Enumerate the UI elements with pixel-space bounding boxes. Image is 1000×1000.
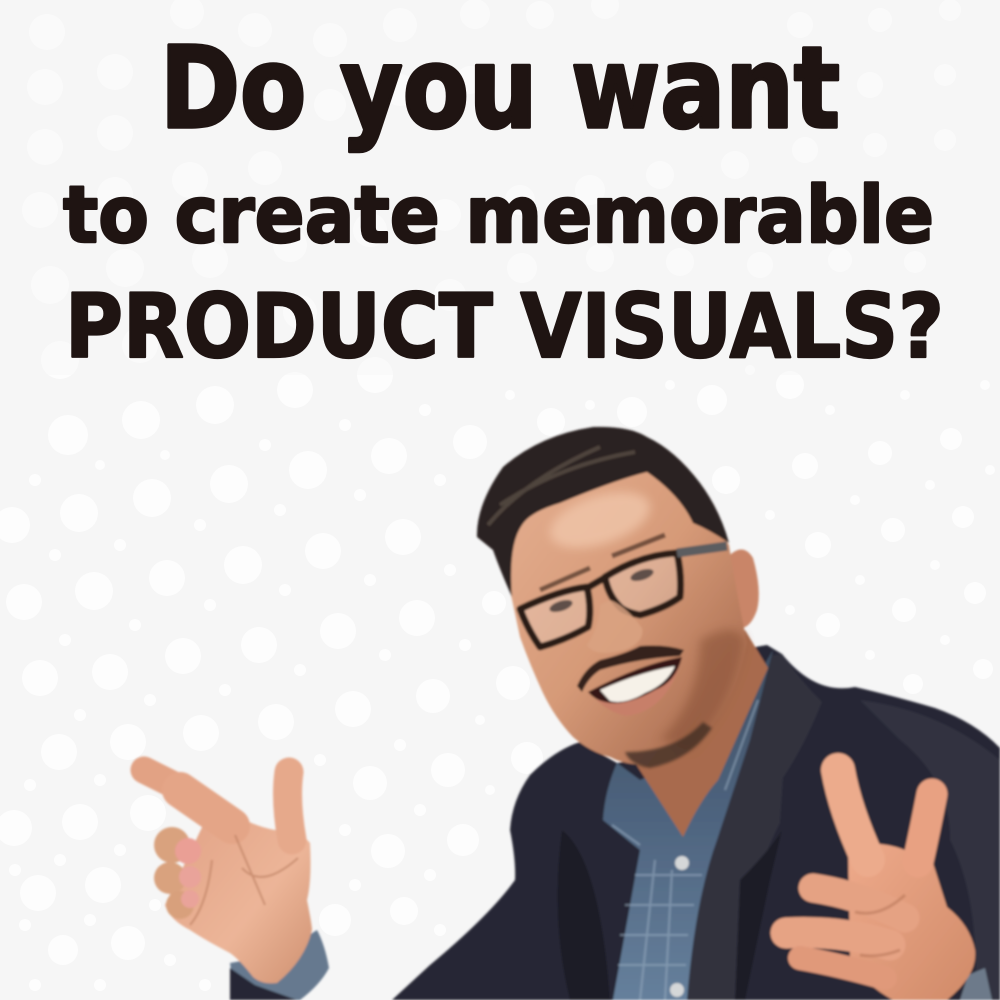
- right shirt cuff: [960, 968, 992, 1000]
- raised finger one: [838, 770, 868, 860]
- right ear: [722, 549, 759, 628]
- moustache: [577, 646, 684, 692]
- pointing finger: [144, 770, 180, 788]
- teeth: [600, 666, 675, 702]
- left palm creases: [190, 835, 298, 925]
- left hand: [144, 770, 312, 983]
- lower lip: [590, 658, 682, 716]
- jacket: [230, 645, 1000, 1000]
- eyes: [548, 567, 655, 614]
- jacket shadow folds: [558, 830, 782, 1000]
- person: [144, 427, 1000, 1000]
- right hand: [786, 770, 975, 1000]
- right palm: [848, 843, 975, 1000]
- hair highlight: [488, 447, 635, 525]
- title line 2: to create memorable: [63, 171, 934, 261]
- eyebrows: [540, 535, 665, 590]
- glasses temple: [677, 546, 727, 553]
- left hand palm: [165, 800, 312, 983]
- glasses: [520, 553, 681, 647]
- neck: [630, 630, 768, 837]
- curled fingers: [154, 827, 201, 919]
- left shirt cuff: [230, 930, 329, 1000]
- pointing finger base: [180, 790, 232, 826]
- shirt: [603, 650, 773, 1000]
- glasses bridge: [587, 577, 606, 588]
- jacket right sleeve sheen: [860, 700, 1000, 1000]
- thumb: [288, 772, 292, 840]
- raised finger two: [918, 794, 932, 862]
- shirt plaid: [612, 700, 758, 1000]
- side finger three: [800, 958, 885, 978]
- shirt buttons: [670, 856, 689, 997]
- forehead highlight: [543, 481, 657, 559]
- title line 1: Do you want: [160, 24, 840, 154]
- jaw shadow: [660, 630, 745, 750]
- mouth: [588, 657, 682, 703]
- right hand knuckle shading: [855, 895, 905, 956]
- dot fade behind the title: [0, 0, 1000, 375]
- beard: [625, 722, 712, 768]
- side finger two: [786, 932, 890, 945]
- jacket lapel: [687, 654, 822, 1000]
- face: [505, 445, 747, 765]
- nose: [587, 600, 642, 653]
- hair: [477, 427, 729, 597]
- side finger one: [813, 888, 905, 918]
- title: [63, 24, 944, 378]
